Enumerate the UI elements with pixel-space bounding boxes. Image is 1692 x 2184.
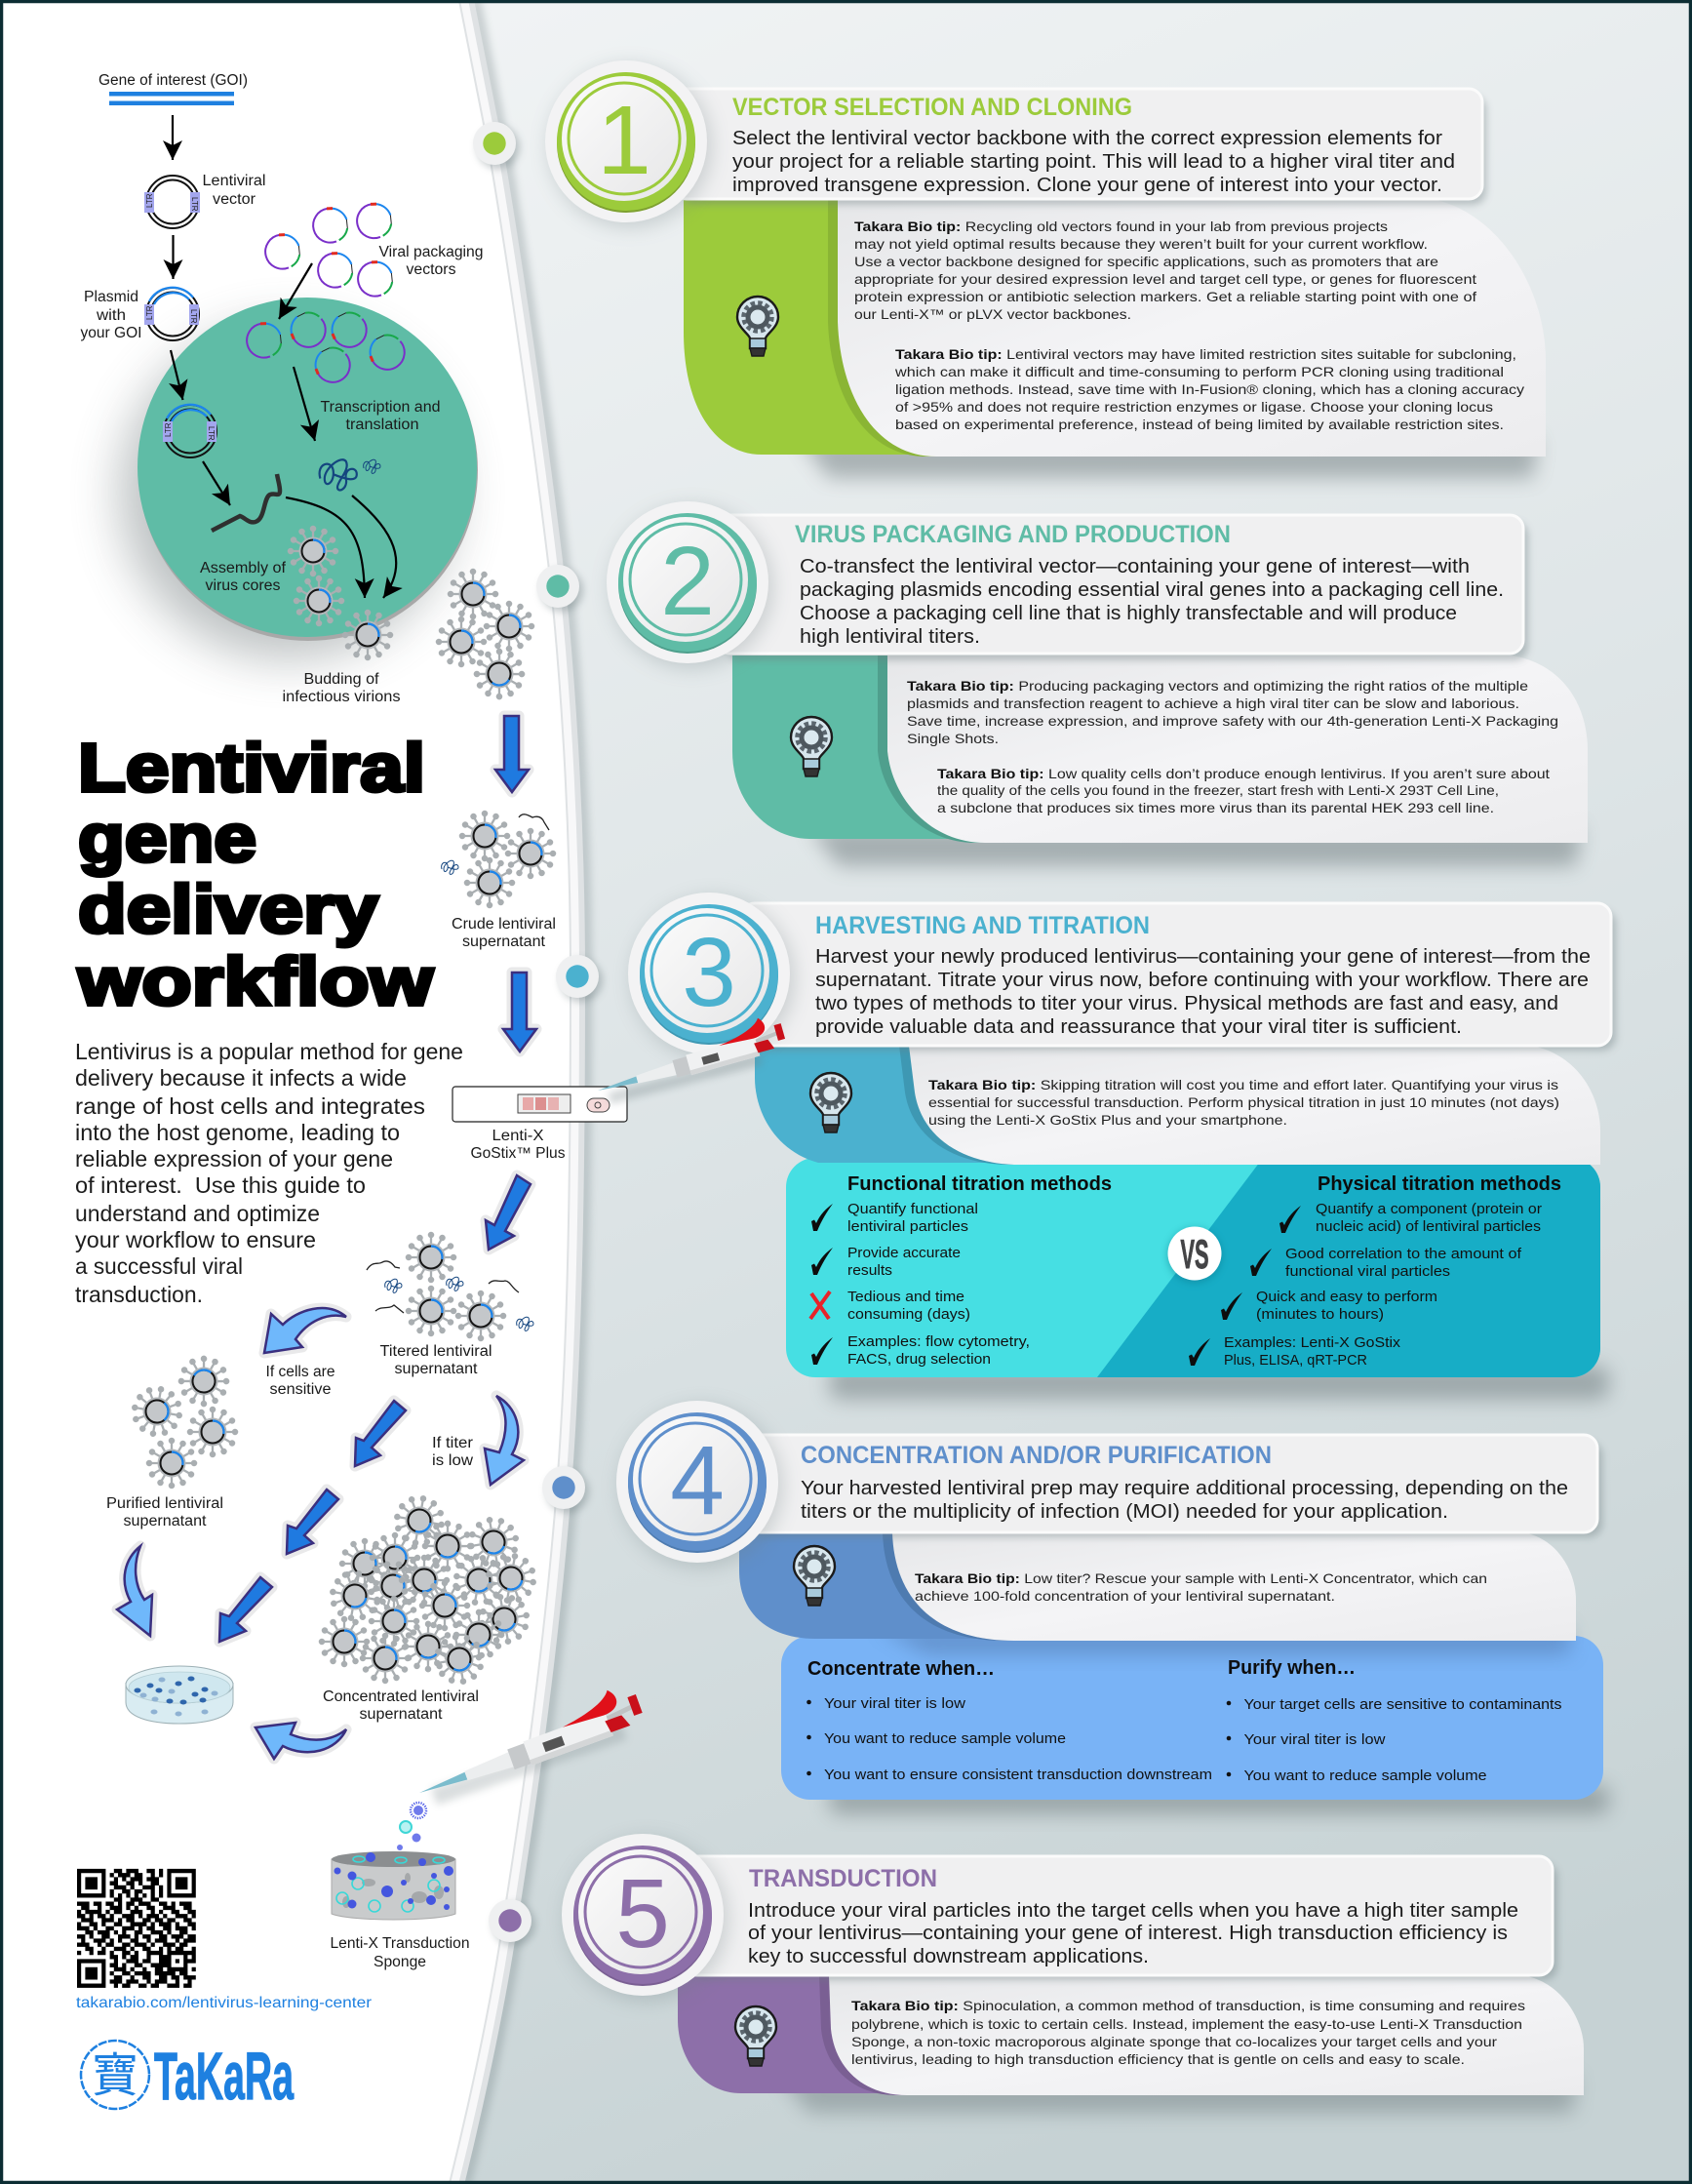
number badge: 2	[660, 527, 715, 636]
cell labels: Budding of	[304, 671, 379, 688]
pipette over device	[591, 1013, 788, 1100]
plasmid in cell: LTR	[164, 422, 173, 437]
physical methods: (minutes to hours)	[1256, 1307, 1384, 1323]
body text: Harvest your newly produced lentivirus—containing your gene of interest—from the	[815, 945, 1591, 968]
tip text 2: based on experimental preference, instead of being limited by available restriction sites.	[895, 417, 1504, 432]
tip text: using the Lenti-X GoStix Plus and your smartphone.	[928, 1112, 1287, 1128]
physical methods: Examples: Lenti-X GoStix	[1224, 1335, 1401, 1351]
VS badge	[1167, 1227, 1222, 1283]
tip text: Takara Bio tip: Spinoculation, a common method of transduction, is time consuming and requires	[851, 1998, 1525, 2013]
heading: HARVESTING AND TITRATION	[815, 912, 1150, 939]
body text	[815, 945, 1591, 1038]
icon: bulb	[810, 1073, 851, 1132]
physical methods: Plus, ELISA, qRT-PCR	[1224, 1353, 1367, 1369]
icon: bulb	[794, 1546, 835, 1606]
panel: step 3	[591, 893, 1616, 1400]
branch labels: sensitive	[269, 1381, 332, 1398]
purify list: You want to reduce sample volume	[1244, 1768, 1486, 1784]
functional methods: Provide accurate	[847, 1246, 961, 1261]
Lenti-X GoStix device	[453, 1087, 627, 1162]
concentrate list: Your viral titer is low	[824, 1696, 966, 1712]
body text	[800, 555, 1504, 648]
tip text: polybrene, which is toxic to certain cells. Instead, implement the easy-to-use Lenti-X Transduction	[851, 2016, 1522, 2032]
intro text: Lentivirus is a popular method for gene	[75, 1039, 463, 1064]
heading card	[741, 1435, 1602, 1537]
tip text 2	[894, 346, 1524, 432]
body text: Co-transfect the lentiviral vector—containing your gene of interest—with	[800, 555, 1470, 577]
physical methods: functional viral particles	[1285, 1264, 1450, 1280]
physical methods: Quick and easy to perform	[1256, 1290, 1437, 1305]
body text: packaging plasmids encoding essential viral genes into a packaging cell line.	[800, 578, 1504, 601]
functional methods: lentiviral particles	[847, 1219, 968, 1235]
branch labels: If titer	[432, 1435, 473, 1451]
check marks functional	[810, 1204, 833, 1365]
tip text	[915, 1570, 1487, 1604]
purify list: Your viral titer is low	[1244, 1732, 1386, 1748]
functional methods: Functional titration methods	[847, 1173, 1112, 1195]
dot 1	[473, 122, 520, 169]
intro text: a successful viral	[75, 1253, 243, 1279]
heading: VIRUS PACKAGING AND PRODUCTION	[795, 521, 1231, 548]
tip text 1: Single Shots.	[907, 731, 999, 746]
intro text: transduction.	[75, 1282, 203, 1307]
intro text: your workflow to ensure	[75, 1227, 316, 1252]
petri dish	[126, 1666, 233, 1724]
functional methods: Examples: flow cytometry,	[847, 1334, 1030, 1350]
cell labels: your GOI	[80, 325, 142, 341]
panel: step 4	[616, 1401, 1609, 1814]
functional methods: Quantify functional	[847, 1202, 978, 1217]
titered supernatant	[367, 1235, 533, 1377]
cell labels	[80, 173, 484, 705]
intro text: of interest. Use this guide to	[75, 1172, 366, 1198]
panel: step 1	[545, 60, 1546, 478]
heading card	[673, 89, 1486, 205]
physical methods: Physical titration methods	[1318, 1173, 1561, 1195]
body text: Introduce your viral particles into the target cells when you have a high titer sample	[748, 1899, 1518, 1922]
tip text 1: appropriate for your desired expression level and target cell type, or genes for fluorescent	[854, 271, 1476, 287]
tip text 1: Use a vector backbone designed for specific applications, such as promoters that are	[854, 254, 1438, 269]
branch labels: If cells are	[265, 1364, 335, 1380]
concentrate list: Concentrate when…	[807, 1658, 995, 1680]
tip text 1: our Lenti-X™ or pLVX vector backbones.	[854, 306, 1131, 322]
heading card	[741, 903, 1616, 1051]
transduction sponge	[330, 1851, 470, 1970]
concentrated supernatant: supernatant	[359, 1706, 443, 1723]
concentrate list: You want to reduce sample volume	[824, 1731, 1066, 1747]
body text: key to successful downstream applications.	[748, 1945, 1149, 1967]
timeline rail	[454, 0, 586, 2184]
plasmid with GOI: LTR	[189, 309, 198, 324]
title: delivery	[78, 871, 378, 947]
tips panel	[739, 1532, 1576, 1654]
intro text: understand and optimize	[75, 1201, 320, 1226]
body text: your project for a reliable starting point. This will lead to a higher viral titer and	[732, 150, 1455, 173]
tip text: achieve 100-fold concentration of your lentiviral supernatant.	[915, 1588, 1335, 1604]
heading: TRANSDUCTION	[749, 1865, 937, 1892]
tip text 1: protein expression or antibiotic selection markers. Get a reliable starting point with one of	[854, 289, 1476, 304]
logo: TaKaRa: 寶	[92, 2037, 138, 2105]
concentrated supernatant	[322, 1494, 537, 1723]
cell labels: vectors	[406, 261, 456, 278]
body text: Choose a packaging cell line that is highly transfectable and will produce	[800, 602, 1457, 624]
Lenti-X GoStix device: GoStix™ Plus	[470, 1145, 566, 1162]
text: gene of interest: Gene of interest (GOI)	[98, 72, 248, 89]
physical methods: Good correlation to the amount of	[1285, 1247, 1522, 1262]
transduction sponge: Lenti-X Transduction	[330, 1935, 470, 1952]
tip text 2: Takara Bio tip: Low quality cells don’t produce enough lentivirus. If you aren’t sure about	[937, 766, 1550, 781]
number badge	[628, 893, 794, 1059]
tip text 2: Takara Bio tip: Lentiviral vectors may have limited restriction sites suitable for subcloning,	[895, 346, 1516, 362]
body text: titers or the multiplicity of infection (MOI) needed for your application.	[801, 1500, 1448, 1523]
check marks physical	[1189, 1206, 1301, 1366]
title: Lentiviral	[78, 730, 425, 806]
concentrate list: You want to ensure consistent transduction downstream	[824, 1767, 1212, 1783]
workflow diagram: supernatants and arrows	[106, 572, 647, 1970]
viral packaging vectors	[247, 204, 410, 387]
branch labels: is low	[432, 1452, 474, 1469]
plasmid with GOI	[144, 288, 199, 340]
tip text 1: may not yield optimal results because they weren’t built for your current workflow.	[854, 236, 1428, 252]
icon: bulb	[737, 297, 778, 356]
plasmid with GOI: LTR	[145, 305, 154, 320]
pipette dispensing	[409, 1682, 647, 1805]
plasmid: lentiviral vector: LTR	[190, 197, 199, 212]
icon: bulb	[791, 717, 832, 776]
crude supernatant: supernatant	[462, 933, 546, 950]
tip text 2: the quality of the cells you found in the freezer, start fresh with Lenti-X 293T Cell Line,	[937, 782, 1499, 798]
purified supernatant: Purified lentiviral	[106, 1495, 223, 1512]
body text	[748, 1899, 1518, 1967]
intro text: into the host genome, leading to	[75, 1120, 400, 1145]
comparison panel	[786, 1158, 1609, 1400]
purify list: Your target cells are sensitive to contaminants	[1244, 1697, 1562, 1713]
virions in cell and budding	[291, 529, 390, 657]
tip text 2: a subclone that produces six times more virus than its parental HEK 293 cell line.	[937, 800, 1494, 815]
tip text 1: plasmids and transfection reagent to achieve a high viral titer can be slow and laborious.	[907, 695, 1519, 711]
tip text: Takara Bio tip: Low titer? Rescue your sample with Lenti-X Concentrator, which can	[915, 1570, 1487, 1586]
dot 3	[556, 955, 603, 1002]
functional methods: consuming (days)	[847, 1307, 970, 1323]
body text: two types of methods to titer your virus. Physical methods are fast and easy, and	[815, 992, 1558, 1014]
concentrated supernatant: Concentrated lentiviral	[323, 1688, 479, 1705]
concentrate or purify panel	[781, 1636, 1609, 1814]
branch labels	[265, 1364, 474, 1469]
plasmid: lentiviral vector	[144, 176, 200, 228]
number badge: 1	[597, 86, 651, 195]
title	[77, 730, 434, 1019]
body text: provide valuable data and reassurance that your viral titer is sufficient.	[815, 1015, 1462, 1038]
plasmid in cell: LTR	[207, 426, 216, 441]
crude supernatant	[442, 814, 556, 950]
body text: improved transgene expression. Clone your gene of interest into your vector.	[732, 174, 1442, 196]
cell	[120, 298, 478, 658]
titered supernatant: Titered lentiviral	[380, 1343, 492, 1360]
number badge	[607, 501, 772, 668]
icon: bulb	[735, 2006, 776, 2066]
diagram: cell and upstream steps	[80, 72, 484, 705]
body text	[732, 127, 1455, 196]
droplets of virus	[397, 1803, 426, 1850]
tips panel	[678, 1975, 1584, 2113]
title: workflow	[77, 943, 434, 1019]
cell labels: translation	[345, 417, 419, 433]
cell labels: Transcription and	[320, 399, 441, 416]
panel: left white column	[0, 0, 577, 2184]
cell labels: Lentiviral	[203, 173, 265, 189]
logo: TaKaRa	[81, 2037, 294, 2114]
timeline dots	[473, 122, 603, 1946]
intro text: reliable expression of your gene	[75, 1146, 393, 1171]
text: gene of interest	[98, 72, 248, 105]
intro text: range of host cells and integrates	[75, 1093, 425, 1119]
body text: Your harvested lentiviral prep may require additional processing, depending on the	[801, 1477, 1568, 1499]
body text: high lentiviral titers.	[800, 625, 980, 648]
cell labels: Assembly of	[200, 560, 287, 576]
title: gene	[78, 800, 256, 876]
panel: step 5	[562, 1834, 1584, 2113]
virions outside cell	[439, 572, 531, 704]
curved arrows	[117, 1308, 524, 1759]
dot 5	[489, 1899, 535, 1946]
logo: TaKaRa: TaKaRa	[154, 2039, 294, 2114]
tip text 2	[937, 766, 1550, 815]
cell labels: vector	[213, 191, 256, 208]
heading: VECTOR SELECTION AND CLONING	[732, 94, 1132, 121]
functional methods: FACS, drug selection	[847, 1352, 991, 1368]
heading card	[683, 1856, 1557, 1980]
tip text 2: of >95% and does not require restriction enzymes or ligase. Choose your cloning locus	[895, 399, 1493, 415]
dot 2	[536, 565, 583, 612]
QR code	[77, 1871, 196, 1986]
tip text 1: Takara Bio tip: Recycling old vectors found in your lab from previous projects	[854, 218, 1388, 234]
transduction sponge: Sponge	[374, 1954, 426, 1970]
number badge	[562, 1834, 728, 2001]
physical methods: Quantify a component (protein or	[1316, 1202, 1542, 1217]
tip text 1	[907, 678, 1558, 746]
Lenti-X GoStix device: Lenti-X	[492, 1128, 544, 1144]
number badge	[545, 60, 711, 227]
straight arrows	[219, 716, 536, 1642]
cell labels: infectious virions	[283, 689, 401, 705]
purify list: Purify when…	[1228, 1657, 1356, 1679]
tip text 1	[854, 218, 1476, 322]
number badge: 3	[682, 918, 736, 1027]
URL: takarabio.com/lentivirus-learning-center	[76, 1995, 373, 2011]
tips panel	[732, 655, 1588, 866]
body text: supernatant. Titrate your virus now, before continuing with your workflow. There are	[815, 969, 1589, 991]
tip text: lentivirus, leading to high transduction efficiency that is gentle on cells and easy to scale.	[851, 2051, 1465, 2067]
titered supernatant: supernatant	[394, 1361, 478, 1377]
plasmid: lentiviral vector: LTR	[145, 193, 154, 208]
body text	[801, 1477, 1568, 1523]
dot 4	[542, 1466, 589, 1513]
crude supernatant: Crude lentiviral	[452, 916, 556, 933]
tip text 1: Save time, increase expression, and improve safety with our 4th-generation Lenti-X Packaging	[907, 713, 1558, 729]
number badge: 4	[670, 1426, 725, 1535]
mRNA squiggle	[212, 474, 280, 531]
tips panel	[755, 1046, 1600, 1165]
body text: of your lentivirus—containing your gene of interest. High transduction efficiency is	[748, 1922, 1508, 1944]
purified supernatant: supernatant	[123, 1513, 207, 1529]
tip text 1: Takara Bio tip: Producing packaging vectors and optimizing the right ratios of the multiple	[907, 678, 1528, 694]
VS badge: VS	[1180, 1231, 1209, 1277]
functional methods: results	[847, 1263, 892, 1279]
cell labels: Viral packaging	[378, 244, 484, 260]
functional methods	[847, 1173, 1112, 1368]
intro text: delivery because it infects a wide	[75, 1065, 407, 1091]
tip text: Takara Bio tip: Skipping titration will cost you time and effort later. Quantifying your virus is	[928, 1077, 1558, 1092]
number badge: 5	[615, 1859, 670, 1968]
cell labels: Plasmid	[84, 289, 138, 305]
tip text	[851, 1998, 1525, 2067]
tip text	[928, 1077, 1559, 1128]
functional methods: Tedious and time	[847, 1290, 964, 1305]
purify list	[1227, 1657, 1562, 1784]
purified supernatant	[106, 1351, 235, 1529]
black arrows	[171, 115, 396, 598]
body text: Select the lentiviral vector backbone with the correct expression elements for	[732, 127, 1442, 149]
physical methods: nucleic acid) of lentiviral particles	[1316, 1219, 1541, 1235]
tip text: essential for successful transduction. Perform physical titration in just 10 minutes (not days)	[928, 1094, 1559, 1110]
tip text 2: which can make it difficult and time-consuming to perform PCR cloning using traditional	[894, 364, 1504, 379]
intro text	[75, 1039, 463, 1307]
cell labels: virus cores	[205, 577, 281, 594]
number badge	[616, 1401, 782, 1568]
tip text 2: ligation methods. Instead, save time with In-Fusion® cloning, which has a cloning accuracy	[895, 381, 1524, 397]
concentrate list	[807, 1658, 1212, 1783]
heading: CONCENTRATION AND/OR PURIFICATION	[801, 1442, 1272, 1469]
physical methods	[1224, 1173, 1561, 1369]
cell labels: with	[96, 307, 126, 324]
plasmid in cell	[163, 405, 216, 457]
tips panel	[684, 198, 1546, 478]
heading card	[717, 515, 1528, 660]
panel: step 2	[607, 501, 1588, 866]
tip text: Sponge, a non-toxic macroporous alginate sponge that co-localizes your target cells and your	[851, 2034, 1497, 2049]
proteins	[320, 459, 380, 491]
